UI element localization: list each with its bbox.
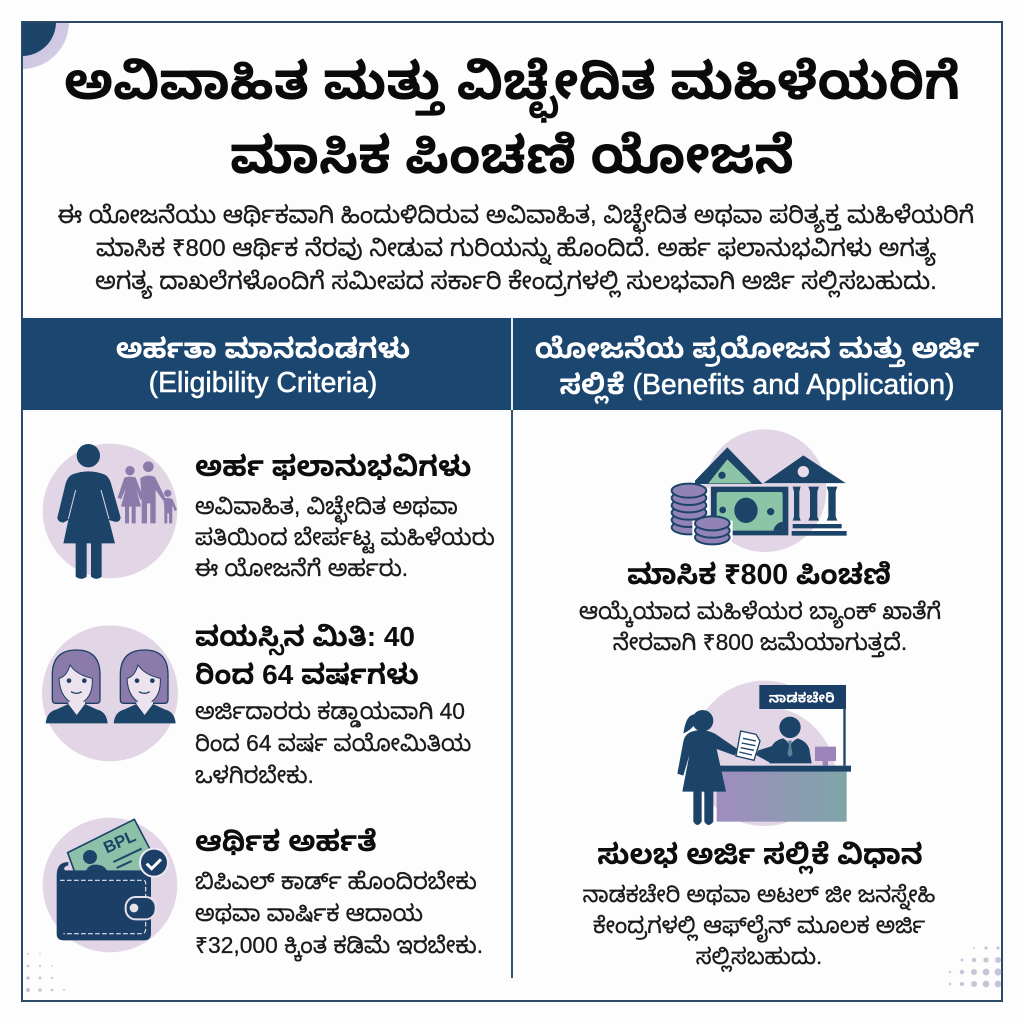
intro paragraph: ಈ ಯೋಜನೆಯು ಆರ್ಥಿಕವಾಗಿ ಹಿಂದುಳಿದಿರುವ ಅವಿವಾಹಿತ, ವಿಚ್ಛೇದಿತ ಅಥವಾ ಪರಿತ್ಯಕ್ತ ಮಹಿಳೆಯರಿಗೆ bbox=[58, 202, 974, 229]
block: eligible beneficiaries: ಅರ್ಹ ಫಲಾನುಭವಿಗಳು bbox=[195, 451, 471, 483]
text: monthly pension: ಆಯ್ಕೆಯಾದ ಮಹಿಳೆಯರ ಬ್ಯಾಂಕ್ ಖಾತೆಗೆ bbox=[579, 598, 941, 624]
block: financial eligibility: ₹32,000 ಕ್ಕಿಂತ ಕಡಿಮೆ ಇರಬೇಕು. bbox=[195, 932, 483, 958]
header: benefits and application: ಸಲ್ಲಿಕೆ (Benefits and Application) bbox=[560, 369, 954, 401]
heading: monthly pension: ಮಾಸಿಕ ₹800 ಪಿಂಚಣಿ bbox=[627, 559, 891, 591]
block: age limit: ರಿಂದ 64 ವರ್ಷಗಳು bbox=[195, 659, 419, 690]
header: eligibility criteria bbox=[116, 333, 410, 399]
header: benefits and application bbox=[535, 333, 979, 404]
intro paragraph bbox=[58, 202, 974, 299]
block: eligible beneficiaries: ಈ ಯೋಜನೆಗೆ ಅರ್ಹರು. bbox=[195, 554, 408, 580]
text: easy application: ನಾಡಕಚೇರಿ ಅಥವಾ ಅಟಲ್ ಜೀ ಜನಸ್ನೇಹಿ bbox=[583, 882, 935, 907]
icon: woman and family bbox=[42, 444, 178, 579]
icon: wallet with BPL card bbox=[42, 818, 178, 952]
heading: easy application: ಸುಲಭ ಅರ್ಜಿ ಸಲ್ಲಿಕೆ ವಿಧಾನ bbox=[597, 839, 923, 871]
text: easy application bbox=[583, 882, 935, 972]
block: eligible beneficiaries: ಪತಿಯಿಂದ ಬೇರ್ಪಟ್ಟ ಮಹಿಳೆಯರು bbox=[195, 524, 495, 550]
title bbox=[64, 52, 960, 184]
intro paragraph: ಮಾಸಿಕ ₹800 ಆರ್ಥಿಕ ನೆರವು ನೀಡುವ ಗುರಿಯನ್ನು ಹೊಂದಿದೆ. ಅರ್ಹ ಫಲಾನುಭವಿಗಳು ಅಗತ್ಯ bbox=[96, 235, 936, 262]
text: monthly pension bbox=[579, 598, 941, 658]
block: age limit: ಒಳಗಿರಬೇಕು. bbox=[195, 762, 314, 788]
block: age limit: ವಯಸ್ಸಿನ ಮಿತಿ: 40 bbox=[195, 621, 415, 652]
block: financial eligibility: ಆರ್ಥಿಕ ಅರ್ಹತೆ bbox=[195, 826, 377, 858]
icon: application counter bbox=[677, 680, 851, 826]
block: eligible beneficiaries: ಅವಿವಾಹಿತ, ವಿಚ್ಛೇದಿತ ಅಥವಾ bbox=[195, 492, 458, 518]
text: monthly pension: ನೇರವಾಗಿ ₹800 ಜಮೆಯಾಗುತ್ತದೆ. bbox=[613, 629, 907, 655]
title: ಅವಿವಾಹಿತ ಮತ್ತು ವಿಚ್ಛೇದಿತ ಮಹಿಳೆಯರಿಗೆ bbox=[64, 52, 960, 110]
text: easy application: ಸಲ್ಲಿಸಬಹುದು. bbox=[696, 944, 822, 969]
icon: application counter: ನಾಡಕಚೇರಿ bbox=[769, 690, 835, 705]
icon: wallet with BPL card: BPL bbox=[101, 826, 139, 857]
header: eligibility criteria: (Eligibility Criteria) bbox=[149, 367, 377, 399]
block: age limit: ರಿಂದ 64 ವರ್ಷ ವಯೋಮಿತಿಯ bbox=[195, 730, 471, 756]
icon: money and bank bbox=[670, 429, 847, 552]
block: eligible beneficiaries bbox=[195, 451, 495, 580]
block: financial eligibility: ಬಿಪಿಎಲ್ ಕಾರ್ಡ್ ಹೊಂದಿರಬೇಕು bbox=[195, 868, 477, 894]
title: ಮಾಸಿಕ ಪಿಂಚಣಿ ಯೋಜನೆ bbox=[230, 126, 794, 184]
header: benefits and application: ಯೋಜನೆಯ ಪ್ರಯೋಜನ ಮತ್ತು ಅರ್ಜಿ bbox=[535, 333, 979, 364]
text: easy application: ಕೇಂದ್ರಗಳಲ್ಲಿ ಆಫ್‌ಲೈನ್ ಮೂಲಕ ಅರ್ಜಿ bbox=[593, 913, 925, 938]
block: financial eligibility bbox=[195, 826, 483, 962]
block: age limit: ಅರ್ಜಿದಾರರು ಕಡ್ಡಾಯವಾಗಿ 40 bbox=[195, 698, 465, 724]
intro paragraph: ಅಗತ್ಯ ದಾಖಲೆಗಳೊಂದಿಗೆ ಸಮೀಪದ ಸರ್ಕಾರಿ ಕೇಂದ್ರಗಳಲ್ಲಿ ಸುಲಭವಾಗಿ ಅರ್ಜಿ ಸಲ್ಲಿಸಬಹುದು. bbox=[95, 268, 937, 295]
block: age limit bbox=[195, 621, 471, 788]
icon: two women bbox=[42, 625, 178, 762]
header: eligibility criteria: ಅರ್ಹತಾ ಮಾನದಂಡಗಳು bbox=[116, 333, 410, 364]
block: financial eligibility: ಅಥವಾ ವಾರ್ಷಿಕ ಆದಾಯ bbox=[195, 900, 423, 926]
